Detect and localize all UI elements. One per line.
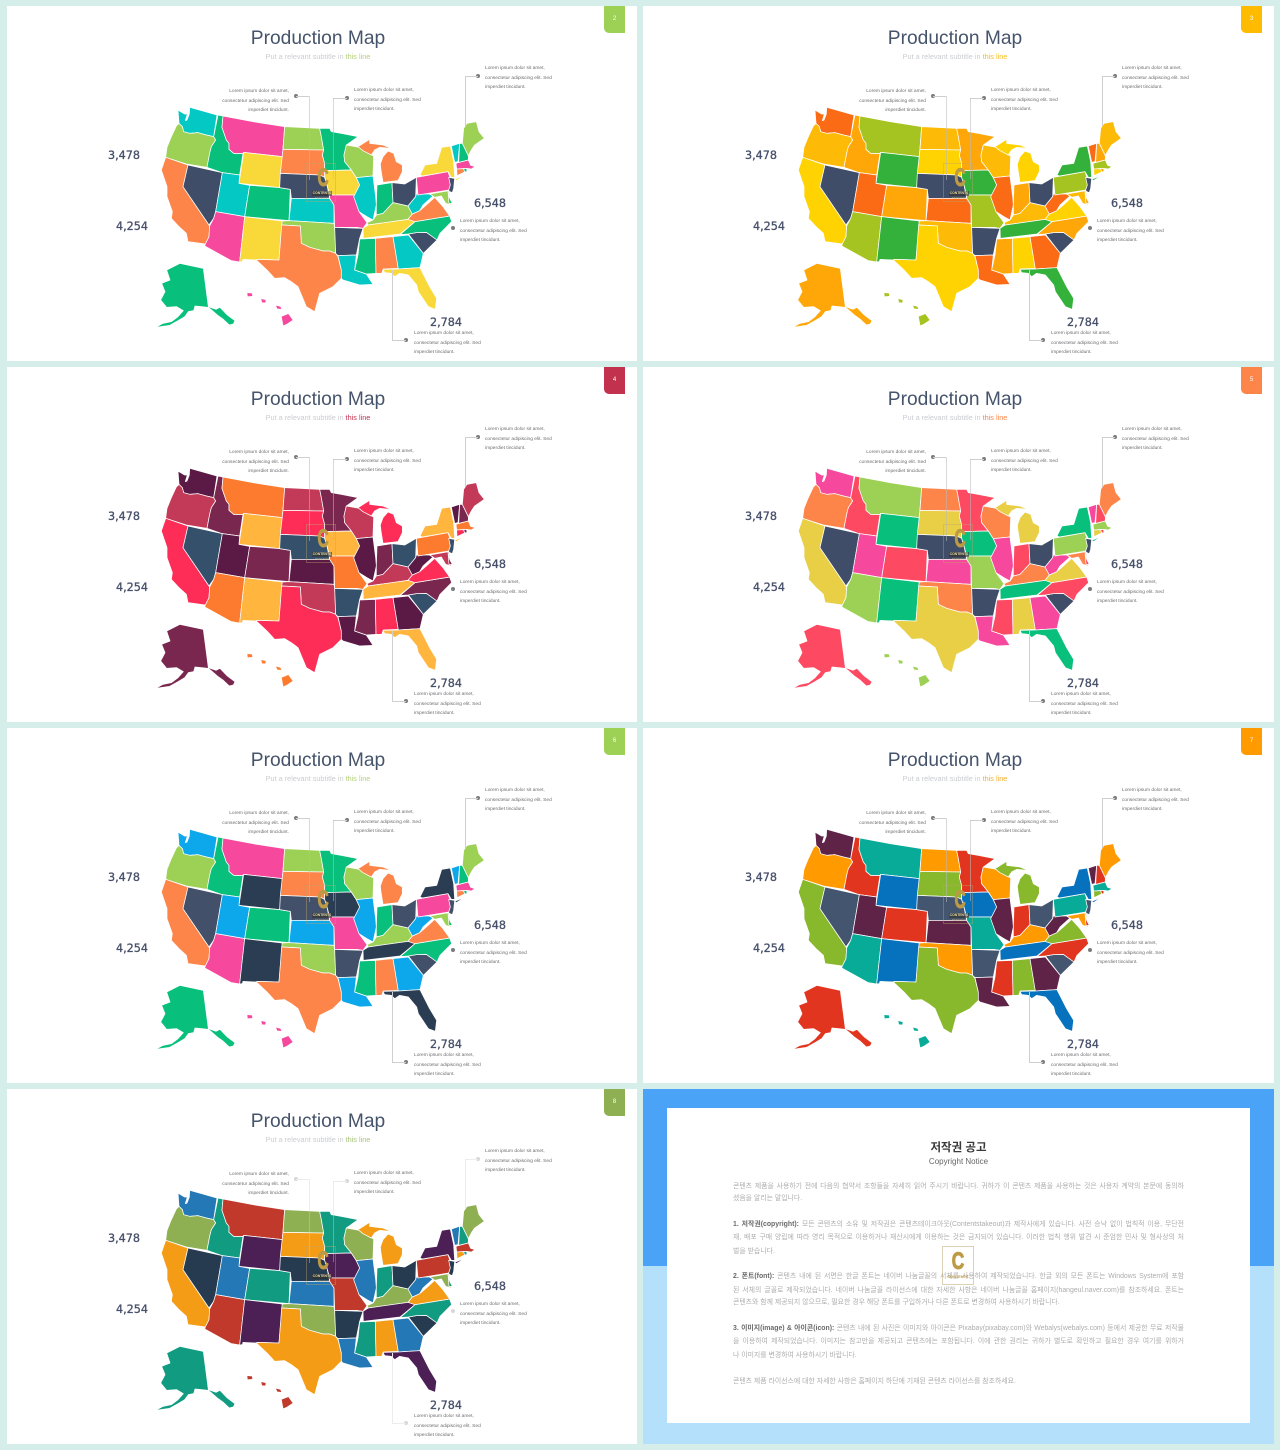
callout: north-central: consectetur adipiscing elit. Sed [354, 459, 421, 464]
logo watermark: TAKEOUT [315, 557, 329, 561]
callout: north-west: imperdiet tincidunt. [885, 830, 926, 835]
callout: north-central: Lorem ipsum dolor sit amet, [354, 810, 414, 815]
callout: 6,548: Lorem ipsum dolor sit amet, [460, 219, 520, 224]
callout: north-west [859, 88, 947, 180]
logo watermark: C [952, 1248, 964, 1275]
panel: slide 6 map [7, 728, 637, 1083]
callout: north-central: consectetur adipiscing elit. Sed [354, 1181, 421, 1186]
value 3,478: 3,478 [108, 149, 140, 162]
page tag [604, 6, 625, 33]
callout: north-central [333, 810, 421, 901]
callout: north-central: imperdiet tincidunt. [991, 107, 1032, 112]
callout: north-east: Lorem ipsum dolor sit amet, [1122, 66, 1182, 71]
callout: 6,548: consectetur adipiscing elit. Sed [1097, 590, 1164, 595]
callout: 2,784 [1029, 631, 1118, 716]
subtitle: Put a relevant subtitle in this line [266, 1135, 370, 1144]
logo watermark: CONTENTS [313, 1274, 331, 1278]
callout: 2,784: consectetur adipiscing elit. Sed [414, 702, 481, 707]
logo watermark [943, 885, 973, 924]
callout: 2,784: imperdiet tincidunt. [414, 711, 455, 716]
US map [794, 108, 1121, 327]
page tag [604, 367, 625, 394]
callout: north-central [333, 1167, 428, 1262]
notice body text [733, 1108, 1184, 1408]
callout: 6,548: imperdiet tincidunt. [1097, 599, 1138, 604]
callout: 6,548: Lorem ipsum dolor sit amet, [460, 941, 520, 946]
callout: 2,784: Lorem ipsum dolor sit amet, [1051, 331, 1111, 336]
callout: north-west: imperdiet tincidunt. [248, 830, 289, 835]
heading: Production Map [251, 389, 385, 410]
subtitle: Put a relevant subtitle in this line [266, 413, 370, 422]
page tag [1241, 6, 1262, 33]
value 3,478: 3,478 [745, 149, 777, 162]
logo watermark [942, 1246, 974, 1285]
callout: north-central [970, 88, 1058, 179]
US map [7, 1089, 637, 1444]
callout: 2,784 [392, 1353, 487, 1443]
callout: north-east: Lorem ipsum dolor sit amet, [1122, 788, 1182, 793]
callout: 6,548 [1088, 197, 1164, 243]
logo watermark: CONTENTS [950, 191, 968, 195]
value 4,254: 4,254 [116, 581, 148, 594]
callout: north-central: imperdiet tincidunt. [991, 468, 1032, 473]
page tag [604, 1089, 625, 1116]
subtitle: Put a relevant subtitle in this line [903, 413, 1007, 422]
notice body text: 재, 배포 구매 양립에 따라 영리 목적으로 이용하거나 재산시에게 이용하는 것은 금지되어 있습니다. 이러한 법칙 행위 발견 시 준엄한 민사 및 형사상의 처 [733, 1234, 1184, 1241]
notice body text: 2. 폰트(font): 콘텐츠 내에 된 서면은 한글 폰트는 네이버 나눔글꼴의 서체를 사용하여 제작되었습니다. 한글 외의 모든 폰트는 Windows System에 포함 [733, 1273, 1184, 1280]
callout: north-east: Lorem ipsum dolor sit amet, [485, 66, 545, 71]
callout: north-east: consectetur adipiscing elit. Sed [1122, 437, 1189, 442]
callout: north-east: imperdiet tincidunt. [1122, 446, 1163, 451]
logo watermark: CONTENTS [950, 552, 968, 556]
callout: 2,784: consectetur adipiscing elit. Sed [414, 341, 481, 346]
logo watermark [306, 1246, 336, 1285]
value 3,478: 3,478 [108, 871, 140, 884]
notice body text: 1. 저작권(copyright): 모든 콘텐츠의 소유 및 저작권은 콘텐츠테이크아웃(Contentstakeout)과 제작사에게 있습니다. 사전 승낙 없이 법칙적 이용, 무단전 [733, 1221, 1184, 1228]
logo watermark: C [954, 886, 966, 914]
callout: 6,548 [451, 197, 527, 243]
callout: 2,784: Lorem ipsum dolor sit amet, [1051, 692, 1111, 697]
page tag: 3 [1250, 16, 1253, 22]
page tag: 2 [613, 16, 616, 22]
callout: north-central: consectetur adipiscing elit. Sed [354, 98, 421, 103]
value 4,254: 4,254 [116, 1303, 148, 1316]
callout: 6,548: imperdiet tincidunt. [460, 960, 501, 965]
logo watermark: C [954, 164, 966, 192]
callout: 2,784 [392, 270, 481, 355]
logo watermark: TAKEOUT [952, 196, 966, 200]
page tag: 4 [613, 377, 616, 383]
heading: Production Map [888, 750, 1022, 771]
callout: north-east: Lorem ipsum dolor sit amet, [485, 427, 545, 432]
callout: north-west: consectetur adipiscing elit. Sed [859, 460, 926, 465]
callout: north-west: imperdiet tincidunt. [248, 469, 289, 474]
callout: north-east: imperdiet tincidunt. [485, 807, 526, 812]
callout: 2,784: consectetur adipiscing elit. Sed [414, 1063, 481, 1068]
callout: north-west: consectetur adipiscing elit. Sed [222, 1182, 289, 1187]
logo watermark [306, 524, 336, 563]
US map [794, 830, 1121, 1049]
callout: north-west: imperdiet tincidunt. [248, 108, 289, 113]
callout: north-east: consectetur adipiscing elit. Sed [485, 798, 552, 803]
logo watermark: CONTENTS [313, 191, 331, 195]
callout: north-west: Lorem ipsum dolor sit amet, [229, 89, 289, 94]
callout: 2,784: 2,784 [1067, 1038, 1099, 1051]
callout: 6,548: Lorem ipsum dolor sit amet, [1097, 219, 1157, 224]
notice body text: 콘텐츠 제품 라이선스에 대한 자세한 사항은 홈페이지 하단에 기재된 콘텐츠 라이선스를 참조하세요. [733, 1378, 1016, 1385]
callout: north-east: Lorem ipsum dolor sit amet, [485, 1149, 545, 1154]
callout: north-east: consectetur adipiscing elit. Sed [485, 1159, 552, 1164]
callout: 6,548 [451, 558, 527, 604]
callout: north-west: Lorem ipsum dolor sit amet, [229, 450, 289, 455]
callout: 2,784: Lorem ipsum dolor sit amet, [414, 1414, 474, 1419]
notice body text: 콘텐츠와 함께 제공되지 않으므로, 필요한 경우 해당 폰트를 구입하거나 다른 폰트로 변경하여 사용하시기 바랍니다. [733, 1299, 1060, 1306]
notice card [667, 1108, 1250, 1423]
callout: north-east [465, 66, 552, 126]
callout: 6,548: imperdiet tincidunt. [1097, 960, 1138, 965]
panel: slide 7 map [644, 728, 1274, 1083]
page tag: 7 [1250, 738, 1253, 744]
callout: north-east: consectetur adipiscing elit. Sed [1122, 76, 1189, 81]
callout: 2,784: imperdiet tincidunt. [414, 1072, 455, 1077]
callout: 2,784: 2,784 [1067, 677, 1099, 690]
callout: 6,548: 6,548 [474, 558, 506, 571]
logo watermark: CONTENTS [948, 1275, 968, 1279]
callout: 6,548: Lorem ipsum dolor sit amet, [1097, 580, 1157, 585]
US map [158, 830, 484, 1049]
callout: 2,784: consectetur adipiscing elit. Sed [1051, 341, 1118, 346]
callout: north-central: Lorem ipsum dolor sit amet, [354, 88, 414, 93]
callout: north-west [859, 450, 947, 541]
callout: north-east: consectetur adipiscing elit. Sed [485, 76, 552, 81]
callout: 6,548 [1088, 558, 1164, 604]
callout: 2,784: Lorem ipsum dolor sit amet, [1051, 1053, 1111, 1058]
heading: Production Map [888, 28, 1022, 49]
value 4,254: 4,254 [116, 220, 148, 233]
callout: 2,784: 2,784 [430, 316, 462, 329]
heading: Production Map [251, 28, 385, 49]
subtitle: Put a relevant subtitle in this line [903, 52, 1007, 61]
value 3,478: 3,478 [108, 510, 140, 523]
callout: north-west [217, 1168, 311, 1263]
logo watermark: TAKEOUT [315, 1279, 329, 1283]
value 4,254: 4,254 [753, 220, 785, 233]
callout: north-central: imperdiet tincidunt. [991, 829, 1032, 834]
heading: Production Map [251, 750, 385, 771]
notice body text: 3. 이미지(image) & 아이콘(icon): 콘텐츠 내에 된 사진은 이미지와 아이콘은 Pixabay(pixabay.com)와 Webalys(webalys.com) 등에서 제공한 무료 저작물 [733, 1325, 1184, 1332]
value 3,478: 3,478 [108, 1232, 140, 1245]
callout: north-west: Lorem ipsum dolor sit amet, [866, 89, 926, 94]
panel: slide 8 map [7, 1089, 637, 1444]
heading: Production Map [888, 389, 1022, 410]
callout: 2,784: imperdiet tincidunt. [1051, 711, 1092, 716]
callout: north-east [1102, 66, 1189, 126]
value 4,254: 4,254 [753, 942, 785, 955]
callout: north-central: Lorem ipsum dolor sit amet, [354, 1171, 414, 1176]
logo watermark [943, 163, 973, 202]
callout: north-west: consectetur adipiscing elit. Sed [859, 821, 926, 826]
callout: 6,548: Lorem ipsum dolor sit amet, [460, 1302, 520, 1307]
value 4,254: 4,254 [753, 581, 785, 594]
callout: north-central: imperdiet tincidunt. [354, 829, 395, 834]
callout: north-central [333, 448, 421, 540]
subtitle: Put a relevant subtitle in this line [266, 52, 370, 61]
callout: north-east [465, 788, 552, 848]
callout: north-east: consectetur adipiscing elit. Sed [1122, 798, 1189, 803]
logo watermark: C [317, 886, 329, 914]
callout: north-west [859, 810, 947, 902]
logo watermark: C [317, 1247, 329, 1275]
callout: 2,784: imperdiet tincidunt. [1051, 1072, 1092, 1077]
callout: 6,548 [1088, 918, 1173, 968]
callout: 2,784: consectetur adipiscing elit. Sed [1051, 1063, 1118, 1068]
callout: north-west: imperdiet tincidunt. [885, 108, 926, 113]
logo watermark: C [954, 525, 966, 553]
callout: 6,548: consectetur adipiscing elit. Sed [1097, 229, 1164, 234]
callout: 2,784 [1029, 992, 1124, 1082]
callout: north-central: imperdiet tincidunt. [354, 1190, 395, 1195]
callout: 6,548: 6,548 [1111, 558, 1143, 571]
callout: north-west: consectetur adipiscing elit. Sed [222, 99, 289, 104]
notice body text: 콘텐츠 제품을 사용하기 전에 다음의 협약서 조항들을 자세히 읽어 주시기 바랍니다. 귀하가 이 콘텐츠 제품을 사용하는 것은 사용자 계약의 본문에 동의하 [733, 1183, 1184, 1190]
callout: north-central: Lorem ipsum dolor sit amet, [991, 449, 1051, 454]
subtitle: Put a relevant subtitle in this line [903, 774, 1007, 783]
callout: 2,784: Lorem ipsum dolor sit amet, [414, 1053, 474, 1058]
logo watermark: TAKEOUT [952, 918, 966, 922]
callout: north-central: consectetur adipiscing elit. Sed [991, 459, 1058, 464]
page tag: 5 [1250, 377, 1253, 383]
US map [158, 108, 484, 327]
callout: north-east: Lorem ipsum dolor sit amet, [485, 788, 545, 793]
logo watermark: CONTENTS [950, 913, 968, 917]
callout: north-central: Lorem ipsum dolor sit amet, [991, 810, 1051, 815]
callout: north-west: Lorem ipsum dolor sit amet, [229, 1172, 289, 1177]
callout: north-west: consectetur adipiscing elit. Sed [222, 821, 289, 826]
callout: north-central: Lorem ipsum dolor sit amet, [354, 449, 414, 454]
logo watermark: C [317, 525, 329, 553]
callout: 6,548: Lorem ipsum dolor sit amet, [460, 580, 520, 585]
callout: north-central: Lorem ipsum dolor sit amet, [991, 88, 1051, 93]
callout: 6,548: consectetur adipiscing elit. Sed [1097, 951, 1164, 956]
callout: 2,784: 2,784 [430, 1399, 462, 1412]
callout: north-east: imperdiet tincidunt. [1122, 85, 1163, 90]
callout: north-east [465, 426, 552, 487]
page tag: 6 [613, 738, 616, 744]
callout: 2,784 [392, 631, 481, 716]
logo watermark: TAKEOUT [315, 918, 329, 922]
panel: slide 4 map [7, 367, 637, 722]
panel: slide 2 map [7, 6, 637, 361]
callout: 2,784 [1029, 270, 1118, 355]
callout: north-west: consectetur adipiscing elit. Sed [222, 460, 289, 465]
subtitle: Put a relevant subtitle in this line [266, 774, 370, 783]
callout: 6,548: imperdiet tincidunt. [460, 1321, 501, 1326]
callout: north-west: Lorem ipsum dolor sit amet, [866, 450, 926, 455]
logo watermark [943, 524, 973, 563]
callout: north-west [222, 450, 310, 541]
callout: 2,784: Lorem ipsum dolor sit amet, [414, 692, 474, 697]
callout: 6,548 [451, 1279, 536, 1329]
callout: north-west: Lorem ipsum dolor sit amet, [229, 811, 289, 816]
callout: 6,548: 6,548 [474, 1280, 506, 1293]
callout: north-central: consectetur adipiscing elit. Sed [354, 820, 421, 825]
callout: 6,548: consectetur adipiscing elit. Sed [460, 1312, 527, 1317]
callout: north-west [222, 810, 310, 902]
page tag: 8 [613, 1099, 616, 1105]
callout: 6,548: consectetur adipiscing elit. Sed [460, 590, 527, 595]
callout: 6,548: 6,548 [474, 919, 506, 932]
US map [158, 468, 484, 688]
callout: north-east [1102, 426, 1189, 487]
callout: 6,548 [451, 919, 527, 965]
US map [794, 468, 1121, 688]
callout: 6,548: Lorem ipsum dolor sit amet, [1097, 941, 1157, 946]
callout: 6,548: imperdiet tincidunt. [1097, 238, 1138, 243]
callout: north-central: imperdiet tincidunt. [354, 107, 395, 112]
callout: north-central: imperdiet tincidunt. [354, 468, 395, 473]
notice body text: 셨음을 알리는 말입니다. [733, 1195, 802, 1202]
callout: 6,548: 6,548 [1111, 197, 1143, 210]
page tag [1241, 367, 1262, 394]
callout: north-central: consectetur adipiscing elit. Sed [991, 820, 1058, 825]
callout: north-east: imperdiet tincidunt. [1122, 807, 1163, 812]
notice body text: 나 이미지를 변경하여 사용하시기 바랍니다. [733, 1352, 857, 1359]
logo watermark: C [317, 164, 329, 192]
callout: 6,548: imperdiet tincidunt. [460, 238, 501, 243]
page tag [604, 728, 625, 755]
callout: north-east: Lorem ipsum dolor sit amet, [1122, 427, 1182, 432]
callout: 6,548: consectetur adipiscing elit. Sed [460, 951, 527, 956]
callout: north-west [222, 88, 310, 180]
notice body text: 벌을 받습니다. [733, 1248, 775, 1255]
panel: slide 5 map [644, 367, 1274, 722]
callout: 2,784: imperdiet tincidunt. [414, 350, 455, 355]
callout: north-west: Lorem ipsum dolor sit amet, [866, 811, 926, 816]
notice subtitle: Copyright Notice [929, 1157, 988, 1166]
logo watermark [306, 163, 336, 202]
callout: north-central: consectetur adipiscing elit. Sed [991, 98, 1058, 103]
callout: north-central [333, 88, 421, 179]
callout: 2,784: 2,784 [1067, 316, 1099, 329]
logo watermark [306, 885, 336, 924]
value 4,254: 4,254 [116, 942, 148, 955]
callout: north-east [1102, 788, 1189, 848]
callout: north-central [970, 810, 1058, 901]
callout: 6,548: imperdiet tincidunt. [460, 599, 501, 604]
callout: 2,784: consectetur adipiscing elit. Sed [1051, 702, 1118, 707]
value 3,478: 3,478 [745, 510, 777, 523]
notice body text: 을 이용하여 제작되었습니다. 이미지는 참고만을 제공되고 콘텐츠에는 포함됩니다. 이에 관한 권리는 귀하가 별도로 확인하고 필요한 경우 여기를 위하거 [733, 1338, 1184, 1345]
callout: 2,784: imperdiet tincidunt. [1051, 350, 1092, 355]
callout: 2,784: 2,784 [430, 1038, 462, 1051]
notice body text: 된 서체의 글꼴로 제작되었습니다. 네이버 나눔글꼴 라이선스에 대한 자세한 사항은 네이버 나눔글꼴 홈페이지(hangeul.naver.com)를 참조하세요. 폰트는 [733, 1287, 1184, 1294]
callout: north-east: consectetur adipiscing elit. Sed [485, 437, 552, 442]
callout: north-west: consectetur adipiscing elit. Sed [859, 99, 926, 104]
panel: copyright notice [643, 1089, 1274, 1444]
value 3,478: 3,478 [745, 871, 777, 884]
callout: 2,784: 2,784 [430, 677, 462, 690]
callout: north-central [970, 448, 1058, 540]
panel: slide 3 map [644, 6, 1274, 361]
callout: 2,784: consectetur adipiscing elit. Sed [414, 1424, 481, 1429]
callout: north-west: imperdiet tincidunt. [248, 1191, 289, 1196]
callout: north-east [465, 1145, 560, 1209]
callout: 2,784 [392, 992, 481, 1077]
logo watermark: TAKEOUT [315, 196, 329, 200]
logo watermark: TAKEOUT [952, 557, 966, 561]
callout: 6,548: consectetur adipiscing elit. Sed [460, 229, 527, 234]
notice title: 저작권 공고 [930, 1142, 987, 1154]
page tag [1241, 728, 1262, 755]
heading: Production Map [251, 1111, 385, 1132]
callout: north-east: imperdiet tincidunt. [485, 1168, 526, 1173]
logo watermark: CONTENTS [313, 552, 331, 556]
callout: 6,548: 6,548 [1111, 919, 1143, 932]
callout: north-east: imperdiet tincidunt. [485, 85, 526, 90]
callout: 2,784: Lorem ipsum dolor sit amet, [414, 331, 474, 336]
callout: 2,784: imperdiet tincidunt. [414, 1433, 455, 1438]
callout: 6,548: 6,548 [474, 197, 506, 210]
callout: north-east: imperdiet tincidunt. [485, 446, 526, 451]
callout: north-west: imperdiet tincidunt. [885, 469, 926, 474]
logo watermark: CONTENTS [313, 913, 331, 917]
